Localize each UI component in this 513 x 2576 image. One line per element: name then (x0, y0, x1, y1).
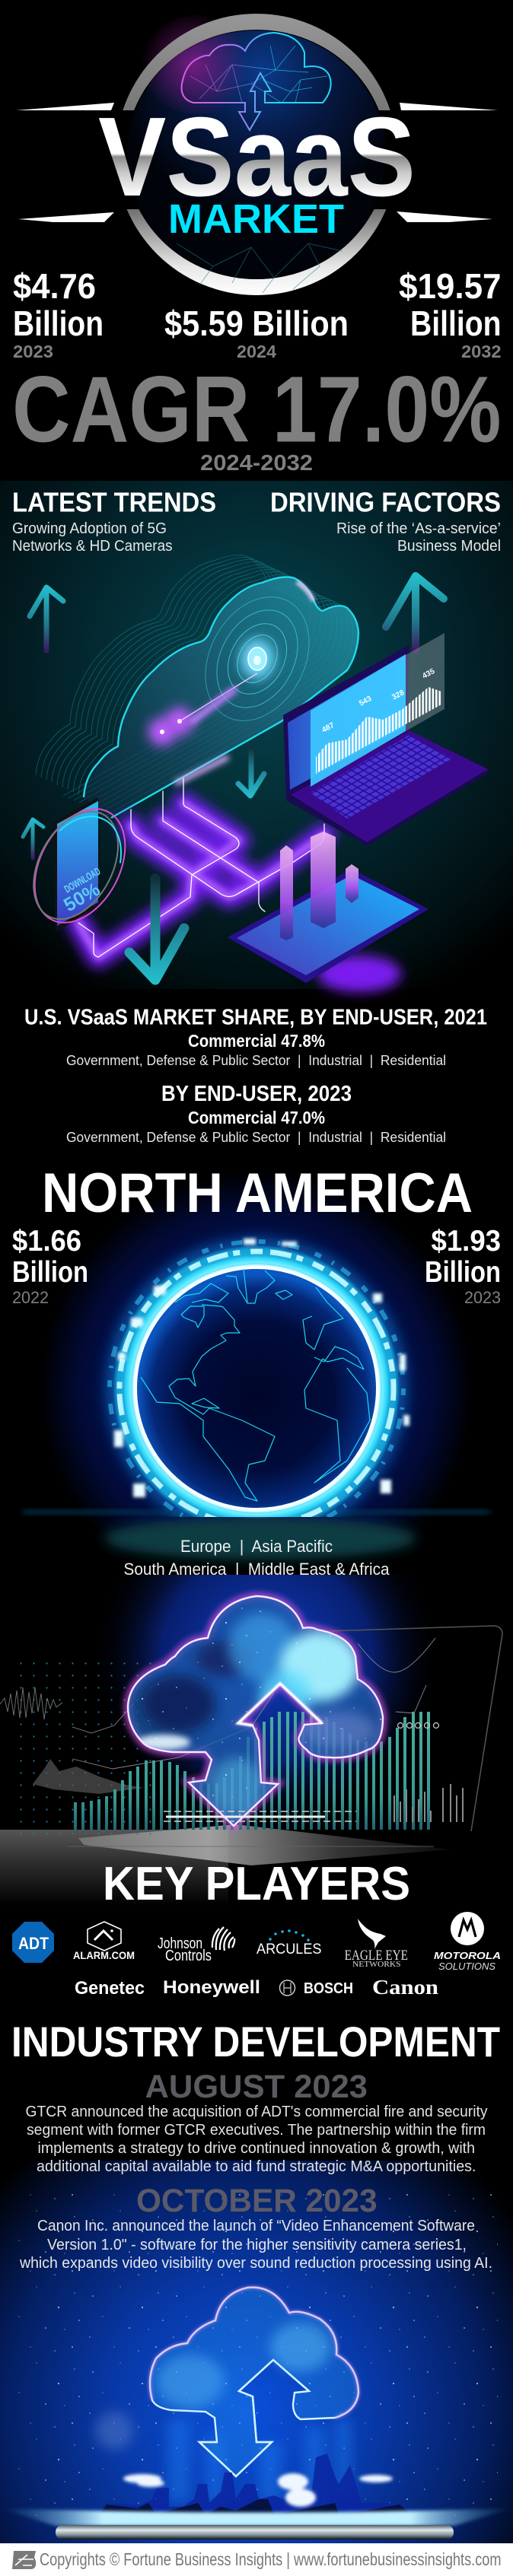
dot grid (20, 1662, 154, 1837)
logo: Johnson Controls: Controls (165, 1948, 212, 1964)
nebula (95, 2412, 133, 2450)
logo: Johnson Controls: Johnson (158, 1935, 202, 1952)
text: other regions: Europe | Asia Pacific (180, 1537, 333, 1556)
text block: October 2023: which expands video visibility over sound reduction processing using AI. (19, 2254, 492, 2272)
heading: latest trends: Growing Adoption of 5G (12, 520, 167, 537)
stat: 2024 value (164, 304, 349, 361)
icon: phone: DOWNLOAD (62, 865, 103, 895)
text block: August 2023: additional capital available to aid fund strategic M&A opportunities. (37, 2158, 476, 2175)
arrow: down centre (238, 748, 264, 796)
panel: trends and cloud illustration (0, 481, 513, 992)
white clouds (123, 2473, 393, 2507)
icon: tablet with bars (228, 832, 429, 992)
metal ring (116, 14, 397, 295)
icon: cloud with arrows (182, 33, 331, 130)
stat: 2022 value: 2022 (12, 1288, 49, 1307)
footer (0, 2543, 513, 2576)
logo: Eagle Eye Networks: NETWORKS (352, 1961, 400, 1969)
title VSaaS: VSaaS (98, 94, 416, 220)
logo: Motorola Solutions: MOTOROLA (434, 1951, 501, 1961)
text block: October 2023: Canon Inc. announced the launch of “Video Enhancement Software (37, 2217, 475, 2234)
icon: phone: 50% (60, 879, 104, 916)
stat: 2024 value: 2024 (237, 342, 276, 361)
text block: October 2023: OCTOBER 2023 (136, 2183, 378, 2219)
cloud with arrows (122, 1590, 388, 1833)
laptop light bars (69, 1811, 434, 1846)
text block: August 2023: segment with former GTCR executives. The partnership within the firm (27, 2121, 486, 2139)
logo: ADT: ADT (18, 1934, 49, 1953)
heading: driving factors (270, 487, 501, 555)
text block: US market share: Government, Defense & Public Sector | Industrial | Residential (66, 1053, 446, 1068)
stat: 2022 value: $1.66 (12, 1225, 81, 1258)
heading: driving factors: Business Model (397, 538, 501, 555)
small circles (397, 1722, 438, 1728)
text block: US market share: Commercial 47.8% (188, 1031, 325, 1051)
waveform (0, 1687, 62, 1719)
stat: 2023 value (425, 1225, 501, 1307)
stat: 2023 value: Billion (425, 1256, 501, 1289)
purple glow nodes (148, 718, 176, 746)
logo: Johnson Controls (158, 1927, 234, 1964)
stat: 2023 value: Billion (13, 304, 104, 343)
logo: Eagle Eye Networks: EAGLE EYE (345, 1948, 408, 1964)
glowing ring (110, 1239, 409, 1535)
holographic chart panel: 328 (390, 689, 406, 702)
logo: Arcules: ARCULES (256, 1942, 321, 1957)
laptop lid and base (0, 1626, 502, 1906)
heading: key players: KEY PLAYERS (103, 1858, 410, 1910)
text block: August 2023: implements a strategy to drive continued innovation & growth, with (38, 2139, 475, 2157)
logo: Arcules (256, 1929, 321, 1957)
panel: holographic cloud over laptop (0, 1575, 502, 1910)
text: other regions (123, 1537, 390, 1579)
logo: Honeywell: Honeywell (163, 1977, 260, 1998)
logo disk (127, 30, 386, 278)
text block: August 2023: GTCR announced the acquisition of ADT's commercial fire and security (26, 2103, 488, 2120)
stat: 2022 value (12, 1225, 88, 1307)
icon: phone (16, 793, 143, 938)
white noise terrain (33, 1759, 144, 1794)
text block: August 2023 (26, 2069, 488, 2175)
phone edge (56, 2525, 454, 2539)
stat: 2023 value: $4.76 (13, 266, 96, 306)
holographic chart panel: 435 (421, 667, 437, 681)
heading: latest trends: LATEST TRENDS (12, 487, 216, 518)
holographic chart panel: 543 (358, 695, 374, 708)
stat: 2024 value: $5.59 Billion (164, 304, 349, 343)
text: other regions: South America | Middle East & Africa (123, 1560, 390, 1579)
logo: ADT (12, 1922, 54, 1963)
stat: 2032 value: 2032 (461, 342, 501, 361)
trend line chart (72, 1638, 435, 1769)
arrow: down large (129, 879, 184, 980)
logo: Canon: Canon (372, 1976, 438, 1999)
heading: North America: NORTH AMERICA (42, 1162, 473, 1224)
heading: latest trends (12, 487, 216, 555)
light beams (167, 2419, 352, 2503)
horizon reflection (23, 1510, 490, 1560)
panel: background starfield (0, 2161, 513, 2543)
decorative blades (16, 103, 498, 222)
subtitle MARKET: MARKET (168, 196, 344, 242)
text block: US market share (24, 1006, 487, 1145)
arrow: up right (386, 576, 444, 650)
stat: 2023 value: 2023 (13, 342, 53, 361)
text block: US market share: Commercial 47.0% (188, 1108, 325, 1127)
logo: Motorola Solutions (434, 1912, 501, 1972)
stat: 2032 value (399, 266, 501, 361)
stat: 2032 value: $19.57 (399, 266, 501, 306)
teal background (0, 481, 513, 989)
icon: laptop (283, 633, 488, 846)
circuit lines with purple glow (78, 778, 324, 957)
logo: Bosch (280, 1980, 353, 1997)
stat: 2023 value: $1.93 (431, 1225, 501, 1258)
text block: October 2023 (19, 2183, 492, 2272)
logo: Motorola Solutions: SOLUTIONS (438, 1961, 496, 1972)
logo: Bosch: BOSCH (304, 1980, 353, 1997)
icon: Fortune Business Insights logo (12, 2551, 36, 2569)
arrow: up small (23, 819, 43, 858)
continents outline (141, 1269, 370, 1501)
holographic chart panel (311, 633, 444, 787)
stat: 2023 value (13, 266, 104, 361)
panel: globe (12, 1162, 501, 1579)
logo: Genetec: Genetec (75, 1978, 145, 1999)
heading: latest trends: Networks & HD Cameras (12, 538, 172, 555)
network lines under title (177, 243, 343, 293)
heading: driving factors: Rise of the ‘As-a-service’ (336, 520, 501, 537)
logo: Alarm.com (73, 1922, 135, 1961)
text block: August 2023: AUGUST 2023 (145, 2069, 368, 2105)
text block: US market share: BY END-USER, 2023 (161, 1082, 352, 1106)
stat: 2023 value: 2023 (464, 1288, 501, 1307)
concentric signal rings (185, 579, 330, 739)
city skyline (95, 2454, 415, 2514)
phone horizon glow (0, 2508, 513, 2526)
arrow: up left (30, 587, 63, 650)
logo: Eagle Eye Networks (345, 1919, 408, 1969)
stat: 2022 value: Billion (12, 1256, 88, 1289)
panel: company logos (12, 1912, 501, 1999)
text block: October 2023: Version 1.0" - software for the higher sensitivity camera series1, (47, 2236, 467, 2253)
upload download cloud (150, 2288, 358, 2476)
cloud illustration (36, 555, 358, 818)
hero: VSaaS market logo (16, 14, 498, 295)
holographic chart panel: 487 (320, 721, 336, 735)
text block: US market share: Government, Defense & Public Sector | Industrial | Residential (66, 1130, 446, 1145)
right small histogram (394, 1784, 463, 1822)
logo: Alarm.com: ALARM.COM (73, 1949, 135, 1961)
CAGR headline: 2024-2032 (200, 451, 313, 475)
bar chart (75, 1712, 429, 1830)
